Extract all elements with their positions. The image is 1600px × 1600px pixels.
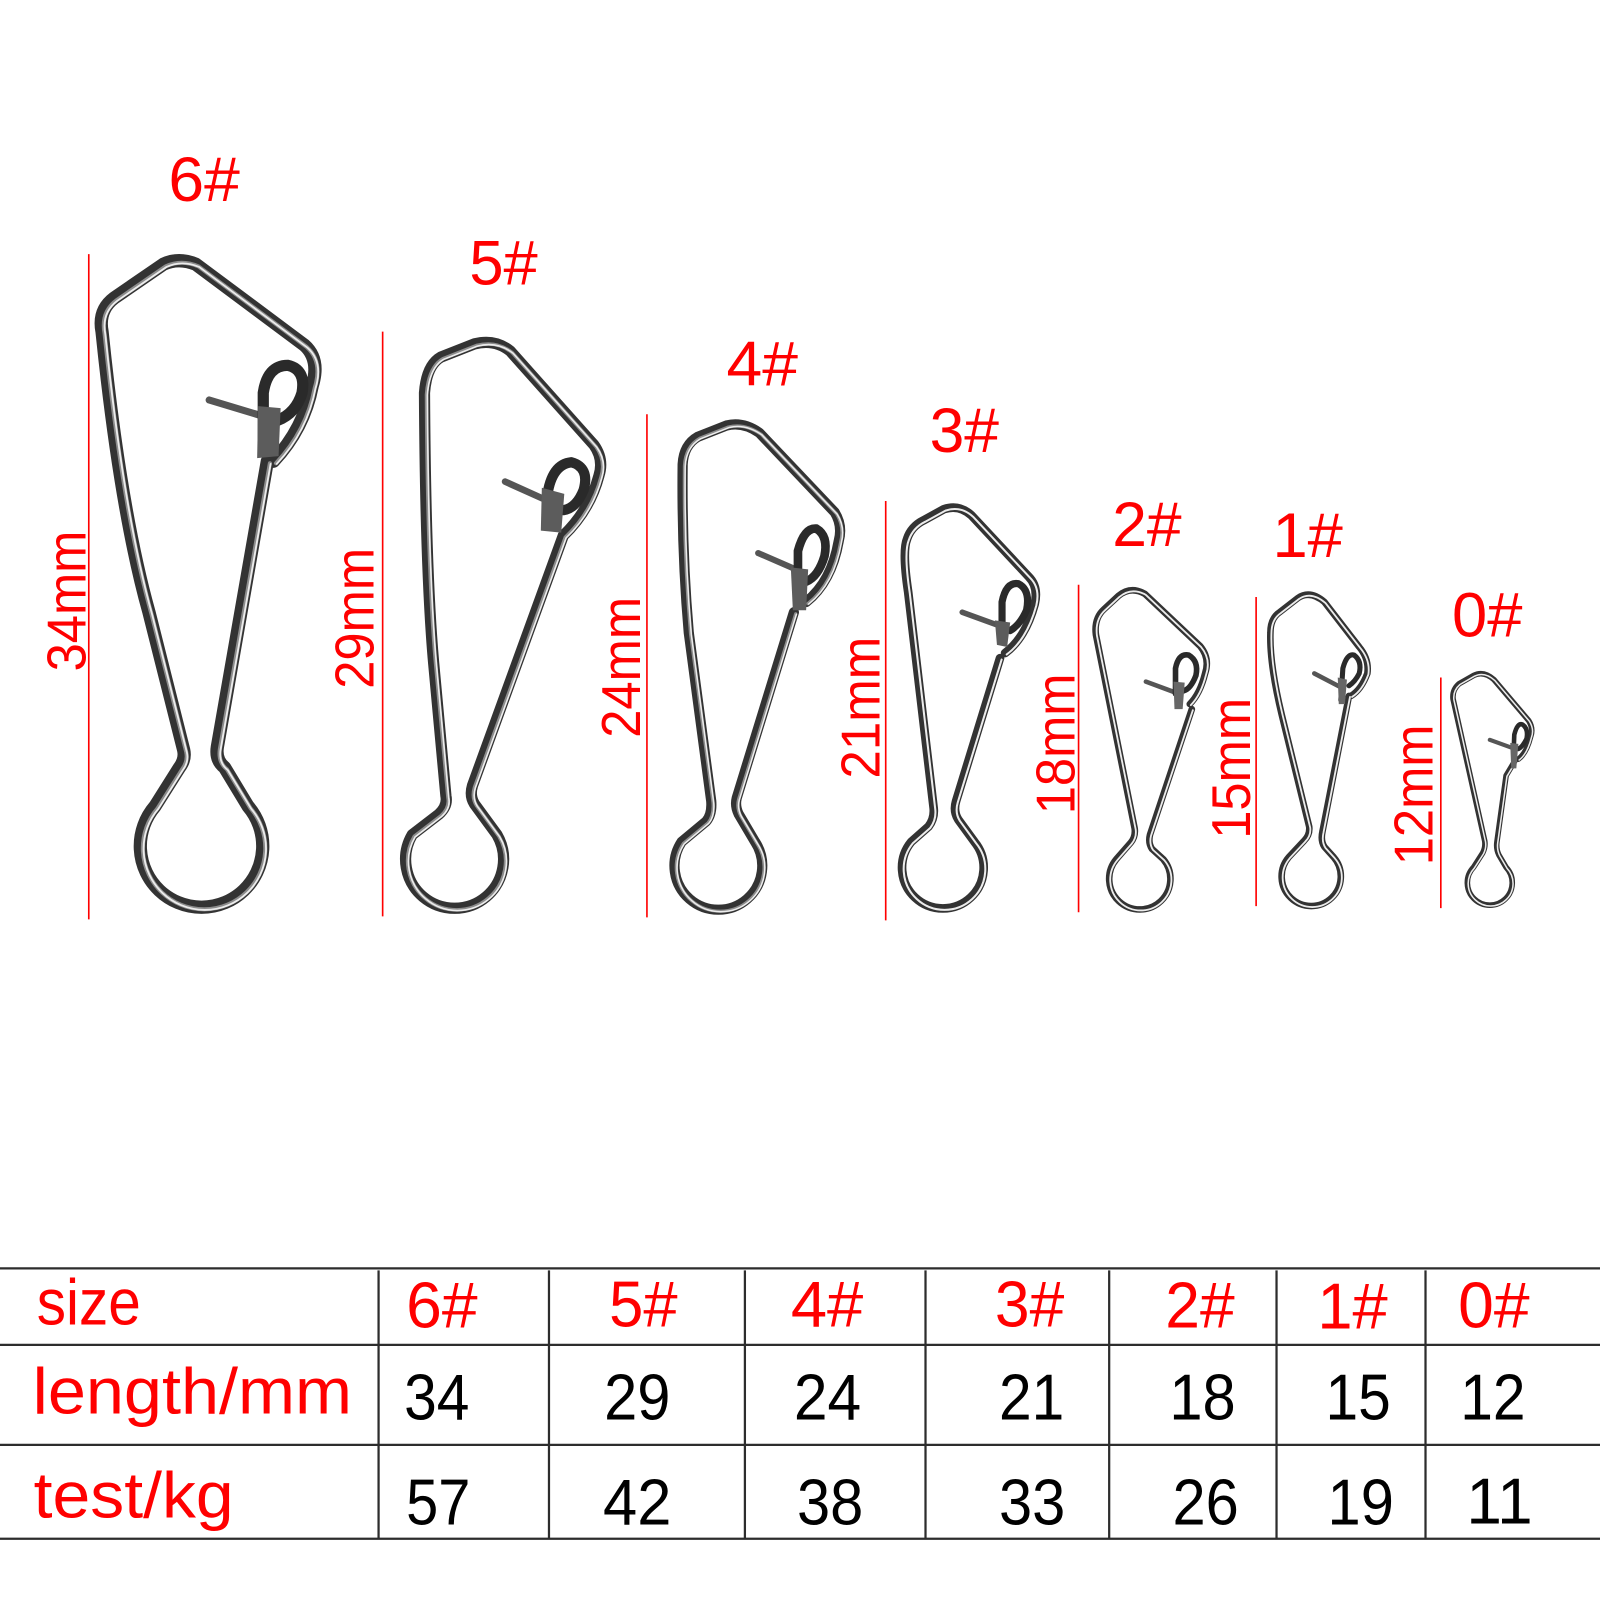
row: length/mm: 29: [604, 1360, 670, 1433]
size label: 2#: 2#: [1112, 490, 1182, 560]
length label: 15mm: 15mm: [1200, 698, 1262, 839]
row: size: 2#: [1165, 1269, 1235, 1342]
row: test/kg: [34, 1458, 1533, 1538]
ring clasp: [1002, 583, 1028, 641]
snap hook 4#: [674, 424, 843, 912]
row: test/kg: 57: [406, 1465, 470, 1538]
size label: 5#: 5#: [469, 229, 538, 299]
dimension line: 21mm: [885, 501, 887, 920]
row: length/mm: length/mm: [33, 1354, 352, 1427]
row: size: 3#: [995, 1268, 1064, 1341]
snap hook 6#: [101, 261, 318, 910]
size label: 1#: 1#: [1272, 501, 1343, 571]
row: test/kg: test/kg: [34, 1458, 234, 1531]
length label: 29mm: 29mm: [323, 548, 385, 689]
row: length/mm: 18: [1169, 1360, 1236, 1433]
row: size: 5#: [609, 1268, 678, 1341]
length label: 18mm: 18mm: [1024, 673, 1086, 814]
row: test/kg: 11: [1466, 1464, 1533, 1537]
row: test/kg: 19: [1328, 1465, 1394, 1538]
pin: [1146, 682, 1173, 692]
length label: 24mm: 24mm: [590, 597, 652, 738]
snap hook 1#: [1270, 595, 1369, 907]
size label: 3#: 3#: [930, 396, 999, 466]
ring clasp: [1341, 655, 1360, 700]
snap hook 5#: [406, 342, 604, 911]
ring clasp: [798, 529, 826, 602]
row: test/kg: 33: [999, 1465, 1065, 1538]
row: length/mm: 15: [1326, 1360, 1391, 1433]
specification table: [0, 1265, 1600, 1539]
dimension line: 34mm: [88, 254, 90, 919]
dimension line: 24mm: [646, 414, 648, 917]
row: length/mm: [33, 1354, 1526, 1433]
pin: [1314, 673, 1340, 687]
dimension line: 29mm: [382, 332, 384, 916]
snap hook 3#: [902, 508, 1037, 910]
row: test/kg: 42: [603, 1465, 671, 1538]
size label: 0#: 0#: [1452, 581, 1522, 651]
pin: [209, 400, 263, 416]
ring clasp: [1513, 724, 1527, 760]
ring clasp: [547, 462, 585, 510]
size label: 4#: 4#: [727, 330, 798, 400]
table grid: [0, 1268, 1600, 1539]
row: test/kg: 26: [1172, 1465, 1239, 1538]
size label: 6#: 6#: [168, 145, 240, 215]
pin: [758, 553, 796, 569]
ring clasp: [1176, 655, 1197, 694]
snap hook 0#: [1453, 674, 1533, 906]
pin: [962, 612, 996, 624]
row: size: [37, 1265, 1530, 1343]
row: length/mm: 24: [794, 1360, 861, 1433]
row: size: 1#: [1317, 1270, 1388, 1343]
dimension line: 12mm: [1440, 678, 1442, 908]
dimension line: 15mm: [1255, 597, 1257, 906]
ring clasp: [263, 365, 303, 449]
pin: [505, 482, 546, 500]
dimension line: 18mm: [1078, 585, 1080, 912]
row: size: 6#: [406, 1269, 478, 1342]
row: size: 0#: [1458, 1269, 1530, 1342]
length label: 12mm: 12mm: [1383, 724, 1445, 865]
row: length/mm: 12: [1460, 1360, 1526, 1433]
row: size: size: [37, 1265, 141, 1338]
row: length/mm: 21: [999, 1360, 1064, 1433]
length label: 21mm: 21mm: [830, 637, 892, 779]
row: test/kg: 38: [797, 1465, 863, 1538]
row: length/mm: 34: [404, 1360, 469, 1433]
length label: 34mm: 34mm: [36, 531, 98, 671]
snap hook 2#: [1096, 590, 1208, 910]
row: size: 4#: [791, 1268, 863, 1341]
pin: [1490, 740, 1512, 748]
